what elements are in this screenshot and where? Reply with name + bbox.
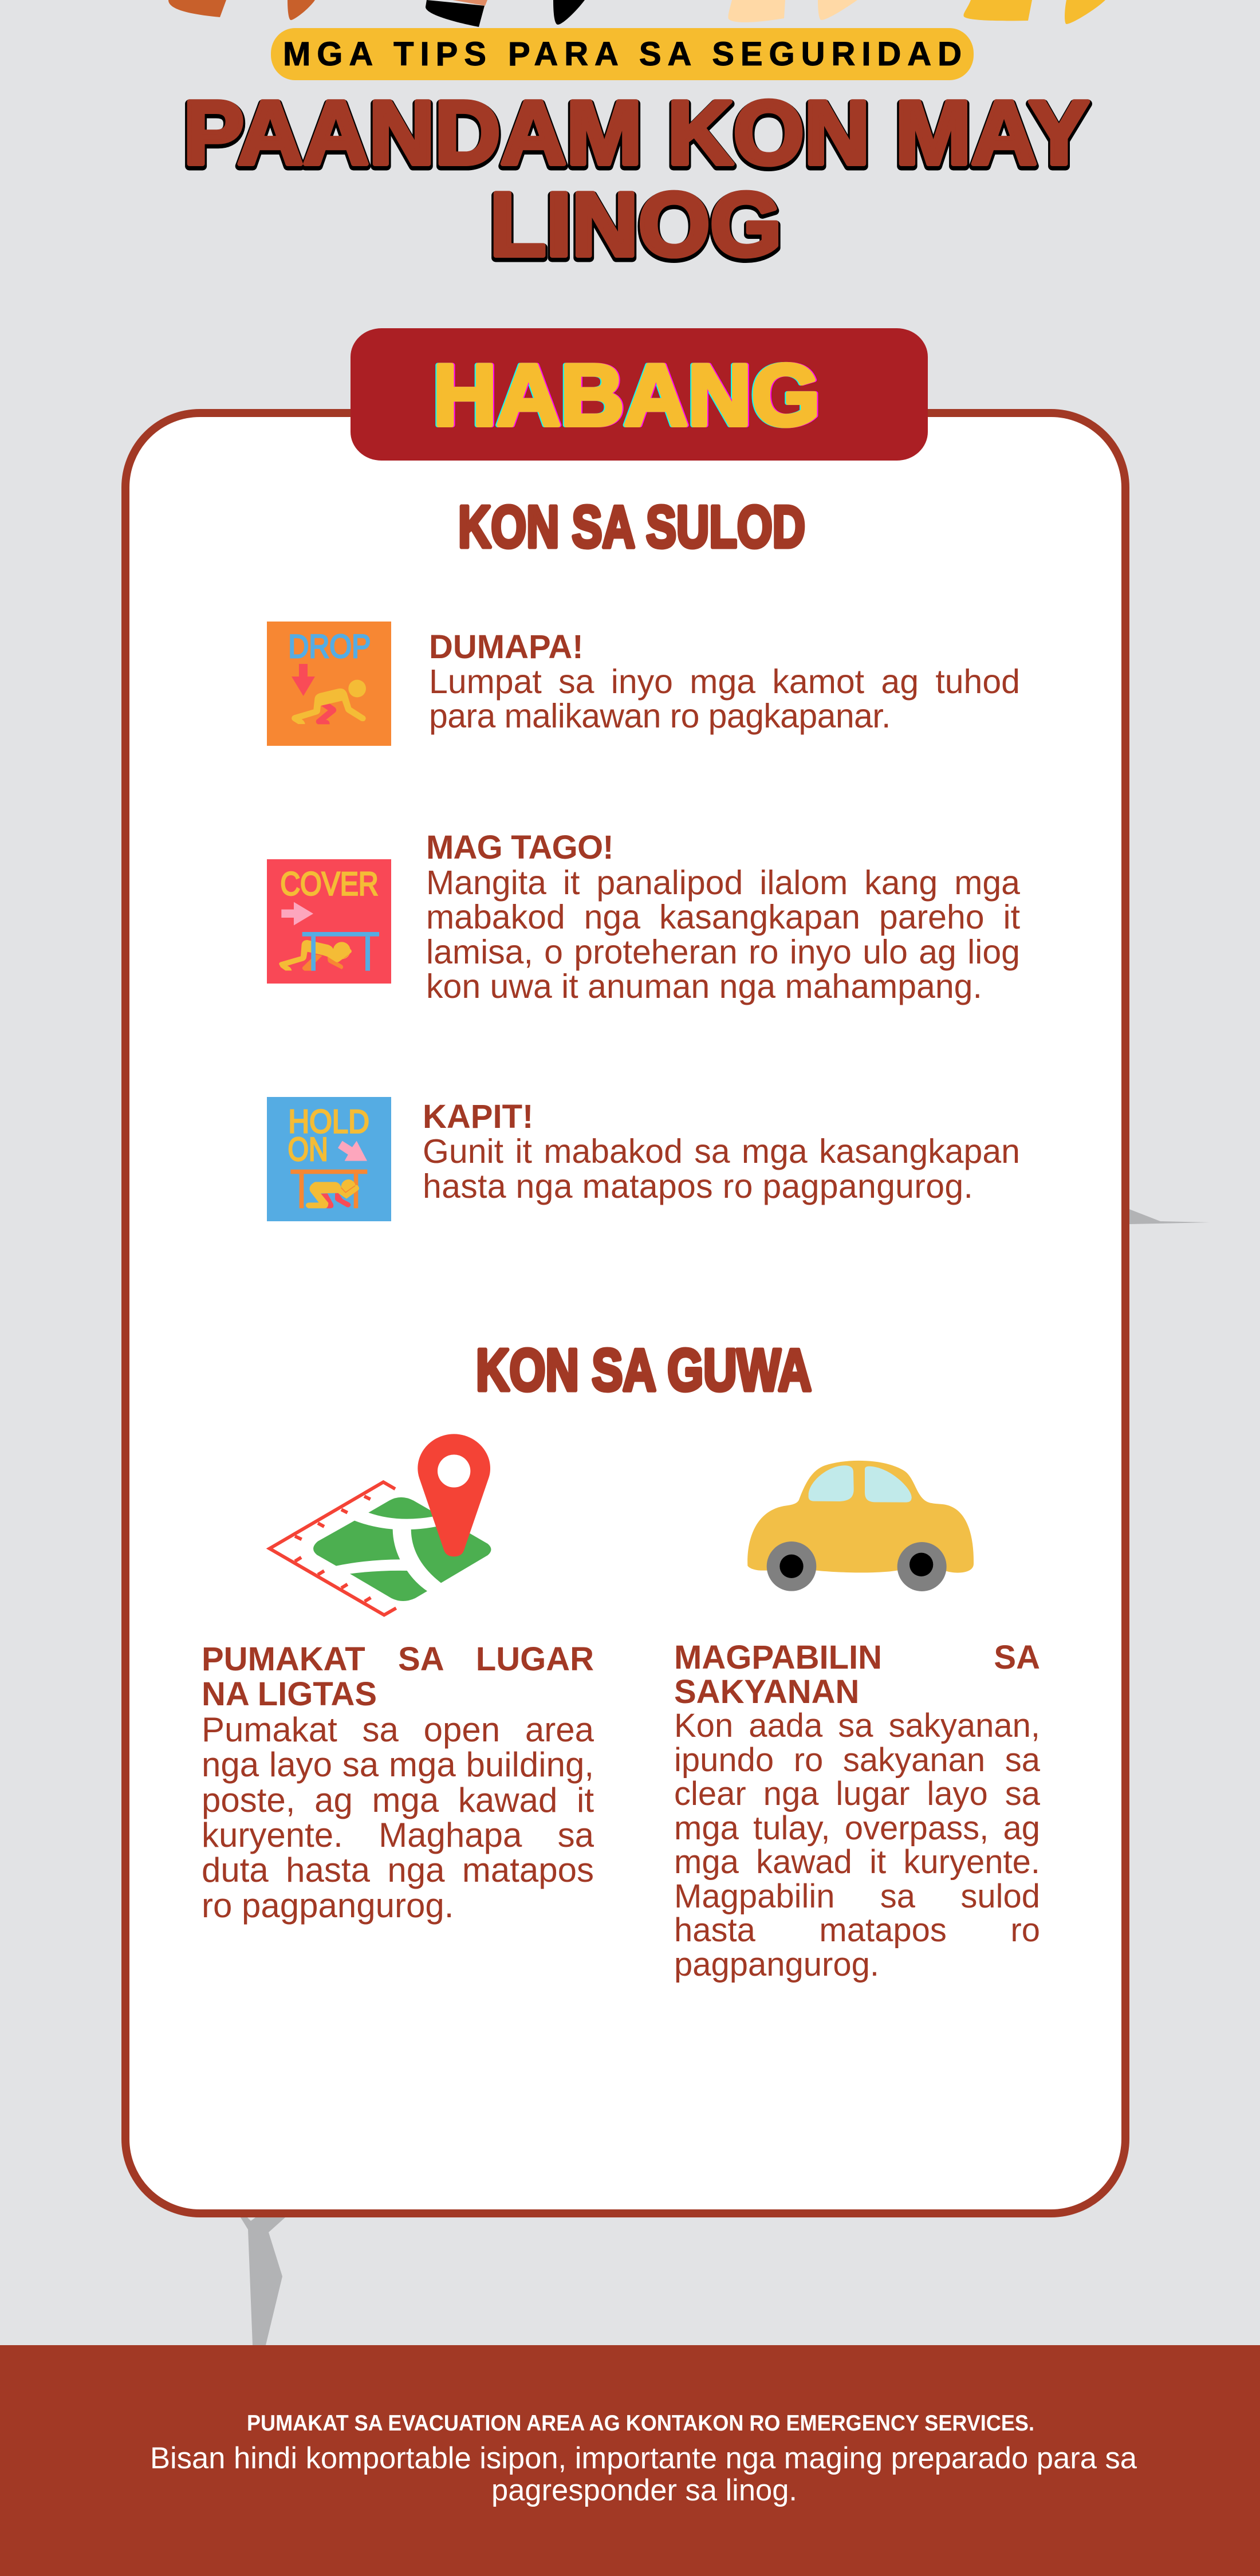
icon: hold on	[267, 1097, 391, 1221]
text block: pumakat sa lugar na ligtas: NA LIGTAS	[202, 1676, 377, 1713]
text block: mag tago: mabakod nga kasangkapan pareho it	[426, 898, 1020, 936]
text block: pumakat sa lugar na ligtas: PUMAKAT SA LUGAR	[202, 1641, 594, 1678]
icon: cover: COVER	[280, 866, 379, 903]
text block: magpabilin sa sakyanan: Kon aada sa sakyanan,	[674, 1707, 1040, 1744]
text block: kapit: hasta nga matapos ro pagpangurog.	[423, 1167, 973, 1205]
title	[183, 82, 1089, 277]
section banner: HABANG	[351, 328, 928, 461]
heading: KON SA SULOD: KON SA SULOD	[458, 494, 805, 560]
text block: kapit	[423, 1098, 1020, 1205]
text block: dumapa: Lumpat sa inyo mga kamot ag tuhod	[429, 663, 1020, 701]
subtitle pill	[271, 28, 974, 80]
text block: magpabilin sa sakyanan: clear nga lugar layo sa	[674, 1775, 1040, 1812]
icon: hold on: HOLD	[288, 1104, 369, 1140]
text block: mag tago	[426, 829, 1020, 1005]
text block: dumapa: DUMAPA!	[429, 628, 584, 666]
section banner: HABANG: HABANG	[432, 347, 819, 444]
text block: pumakat sa lugar na ligtas: nga layo sa mga building,	[202, 1745, 594, 1784]
title: LINOG	[490, 176, 782, 277]
text block: magpabilin sa sakyanan: mga tulay, overpass, ag	[674, 1809, 1040, 1847]
icon: hold on: ON	[288, 1131, 328, 1168]
text block: kapit: KAPIT!	[423, 1098, 533, 1135]
icon: drop	[267, 622, 391, 746]
text block: pumakat sa lugar na ligtas	[202, 1641, 594, 1925]
text block: magpabilin sa sakyanan	[674, 1639, 1040, 1983]
text block: dumapa	[429, 628, 1020, 735]
top illustration: feet cropped at page edge	[168, 0, 1105, 27]
icon: yellow car	[747, 1461, 974, 1591]
text block: kapit: Gunit it mabakod sa mga kasangkapan	[423, 1132, 1020, 1170]
title: PAANDAM KON MAY	[183, 85, 1089, 186]
text block: dumapa: para malikawan ro pagkapanar.	[429, 697, 891, 735]
text block: mag tago: lamisa, o proteheran ro inyo ulo ag liog	[426, 933, 1020, 970]
text block: mag tago: Mangita it panalipod ilalom kang mga	[426, 864, 1020, 902]
icon: drop: DROP	[288, 628, 371, 665]
title: LINOG	[490, 174, 782, 275]
text block: pumakat sa lugar na ligtas: poste, ag mga kawad it	[202, 1781, 594, 1819]
text block: magpabilin sa sakyanan: mga kawad it kuryente.	[674, 1843, 1040, 1881]
icon: cover	[267, 859, 391, 984]
text block: magpabilin sa sakyanan: SAKYANAN	[674, 1673, 859, 1710]
title: PAANDAM KON MAY	[183, 82, 1089, 183]
main white card	[125, 413, 1125, 2213]
text block: mag tago: MAG TAGO!	[426, 829, 613, 866]
text block: magpabilin sa sakyanan: pagpangurog.	[674, 1945, 879, 1983]
text block: magpabilin sa sakyanan: hasta matapos ro	[674, 1912, 1040, 1949]
text block: magpabilin sa sakyanan: Magpabilin sa sulod	[674, 1878, 1040, 1914]
text block: pumakat sa lugar na ligtas: kuryente. Maghapa sa	[202, 1816, 594, 1854]
footer heading: PUMAKAT SA EVACUATION AREA AG KONTAKON RO EMERGENCY SERVICES.	[247, 2411, 1034, 2436]
section banner: HABANG: HABANG	[433, 347, 820, 444]
ground crack: right side	[1129, 1209, 1210, 1224]
text block: pumakat sa lugar na ligtas: Pumakat sa open area	[202, 1710, 594, 1749]
footer body text	[150, 2441, 1137, 2507]
section banner: HABANG: HABANG	[434, 347, 821, 444]
text block: pumakat sa lugar na ligtas: ro pagpangurog.	[202, 1886, 454, 1925]
footer body text: pagresponder sa linog.	[491, 2473, 797, 2507]
text block: pumakat sa lugar na ligtas: duta hasta nga matapos	[202, 1851, 594, 1889]
subtitle pill: MGA TIPS PARA SA SEGURIDAD	[283, 36, 962, 73]
text block: magpabilin sa sakyanan: ipundo ro sakyanan sa	[674, 1741, 1040, 1778]
footer band	[0, 2345, 1260, 2576]
footer body text: Bisan hindi komportable isipon, importante nga maging preparado para sa	[150, 2441, 1137, 2475]
ground crack: bottom	[241, 2217, 285, 2345]
icon: map with location pin	[270, 1434, 491, 1615]
heading: KON SA GUWA: KON SA GUWA	[476, 1337, 812, 1403]
text block: mag tago: kon uwa it anuman nga mahampang.	[426, 968, 982, 1005]
text block: magpabilin sa sakyanan: MAGPABILIN SA	[674, 1639, 1040, 1676]
